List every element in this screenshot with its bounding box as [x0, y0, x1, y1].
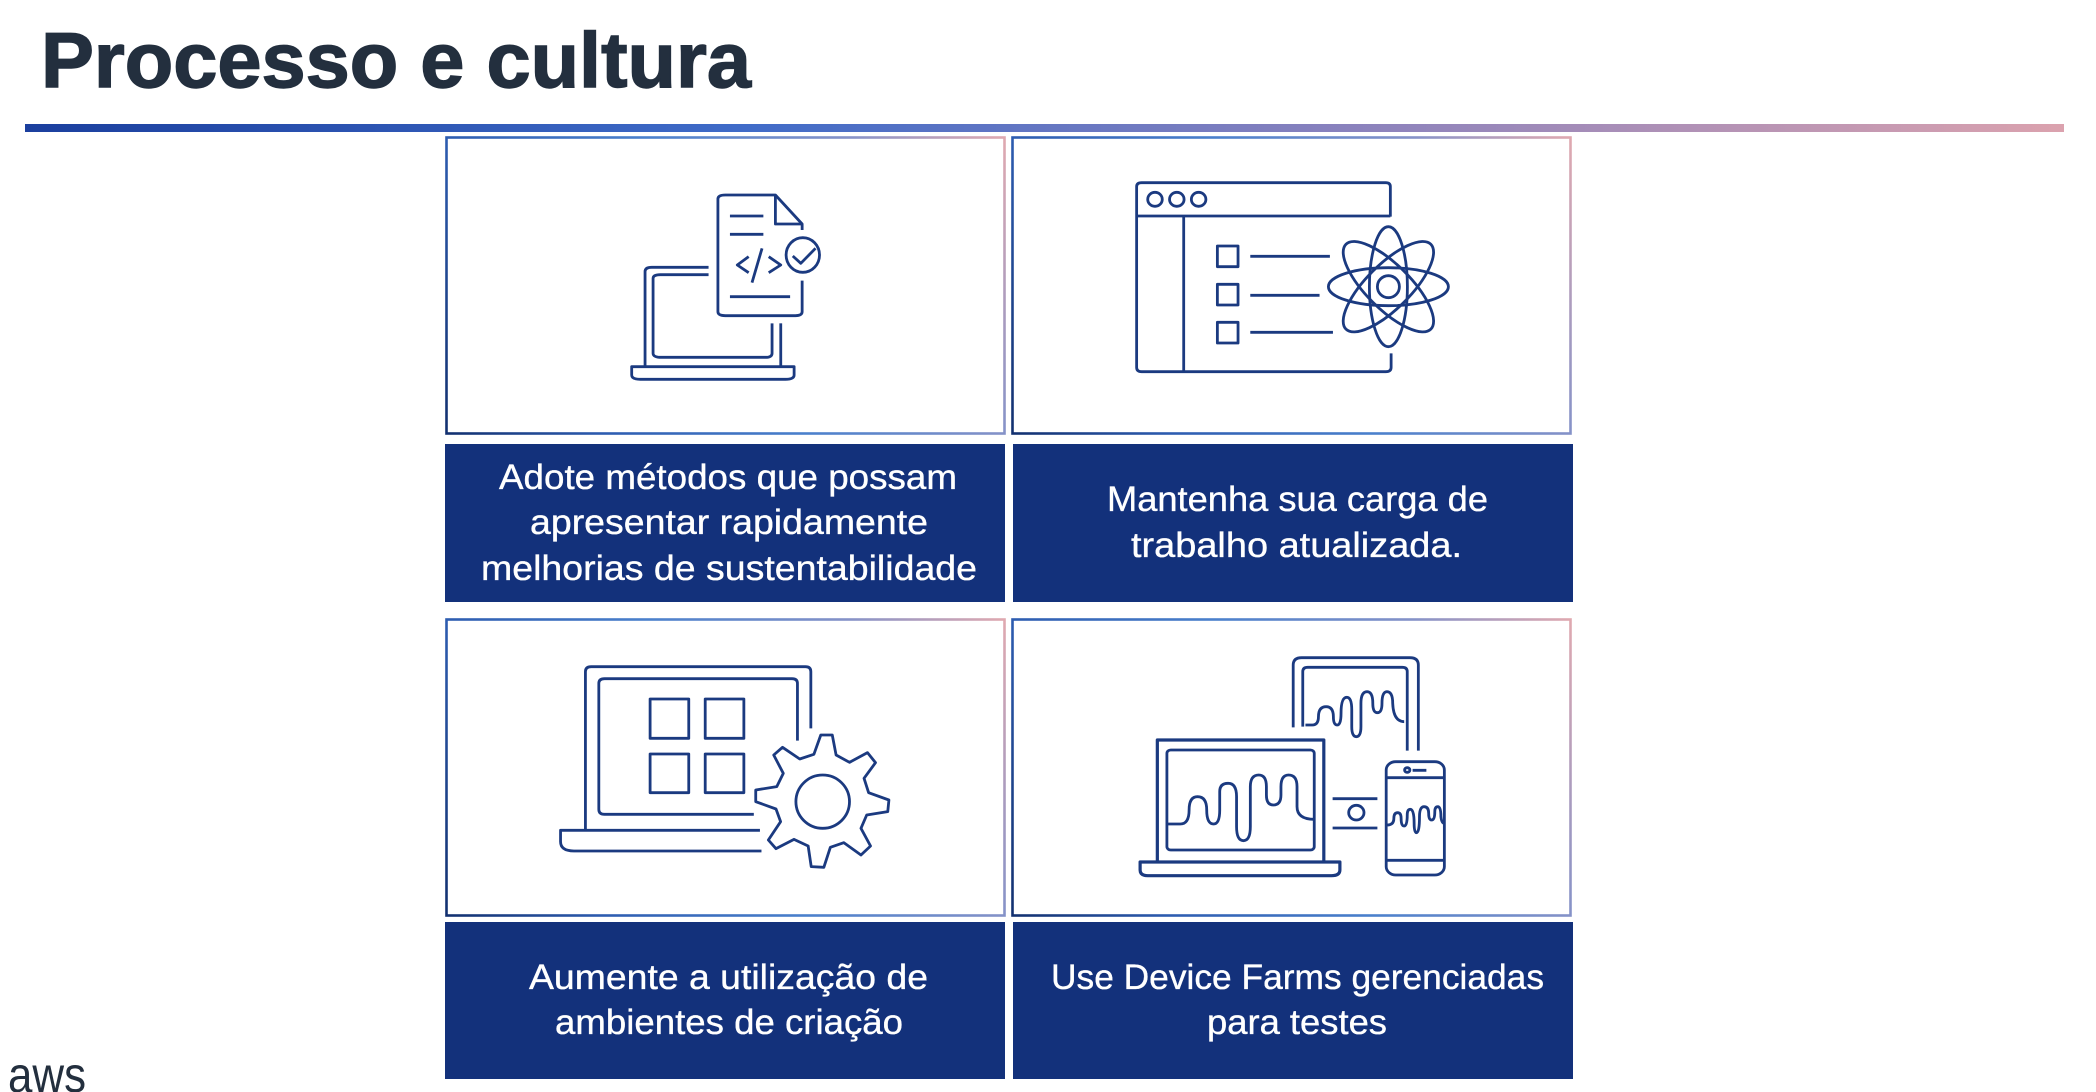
- panel: top-left card: [445, 138, 1005, 602]
- title: Processo e cultura: [41, 16, 752, 104]
- caption bar: device farms: [1013, 922, 1573, 1079]
- caption bar: methods: melhorias de sustentabilidade: [481, 549, 977, 588]
- caption bar: methods: [445, 444, 1005, 602]
- caption bar: build environments: ambientes de criação: [555, 1003, 903, 1042]
- caption bar: build environments: Aumente a utilização de: [529, 958, 928, 997]
- caption bar: build environments: [445, 922, 1005, 1079]
- caption bar: methods: Adote métodos que possam: [499, 458, 957, 497]
- panel: bottom-right card: [1012, 620, 1573, 1079]
- caption bar: workload: [1013, 444, 1573, 602]
- caption bar: device farms: para testes: [1207, 1003, 1387, 1042]
- icon: laptop with code document and check: [632, 195, 820, 379]
- icon: tablet, laptop and phone with waveforms: [1140, 658, 1444, 876]
- caption bar: workload: trabalho atualizada.: [1131, 526, 1462, 565]
- gradient title rule: [25, 124, 2064, 132]
- panel: top-right card: [1012, 138, 1573, 602]
- caption bar: device farms: Use Device Farms gerenciadas: [1051, 958, 1544, 997]
- icon: app window with atom: [1137, 183, 1448, 372]
- icon: laptop with gear: [561, 667, 889, 867]
- caption bar: workload: Mantenha sua carga de: [1107, 480, 1488, 519]
- caption bar: methods: apresentar rapidamente: [530, 503, 928, 542]
- panel: bottom-left card: [445, 620, 1005, 1079]
